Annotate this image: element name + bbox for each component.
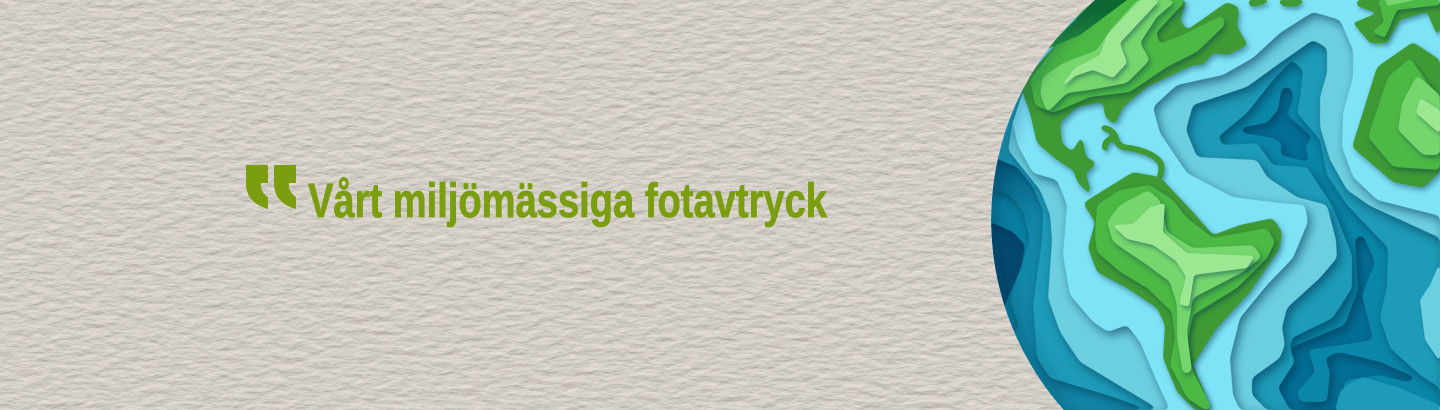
continent: Africa xyxy=(1352,42,1440,188)
ocean layers: central basin xyxy=(1153,12,1440,410)
title: Vårt miljömässiga fotavtryck xyxy=(308,175,827,228)
icon: quotation marks xyxy=(246,165,296,209)
continent: North America xyxy=(1020,0,1248,197)
continent: Caribbean islands xyxy=(1104,128,1162,176)
ocean layers: left side xyxy=(991,88,1168,410)
continent: South America xyxy=(1083,172,1282,410)
ocean base xyxy=(985,0,1440,410)
continent: Greenland and Europe xyxy=(1353,0,1440,43)
globe illustration xyxy=(985,0,1440,410)
continent: small northern islands xyxy=(1248,0,1306,7)
globe edge shading xyxy=(991,0,1095,410)
